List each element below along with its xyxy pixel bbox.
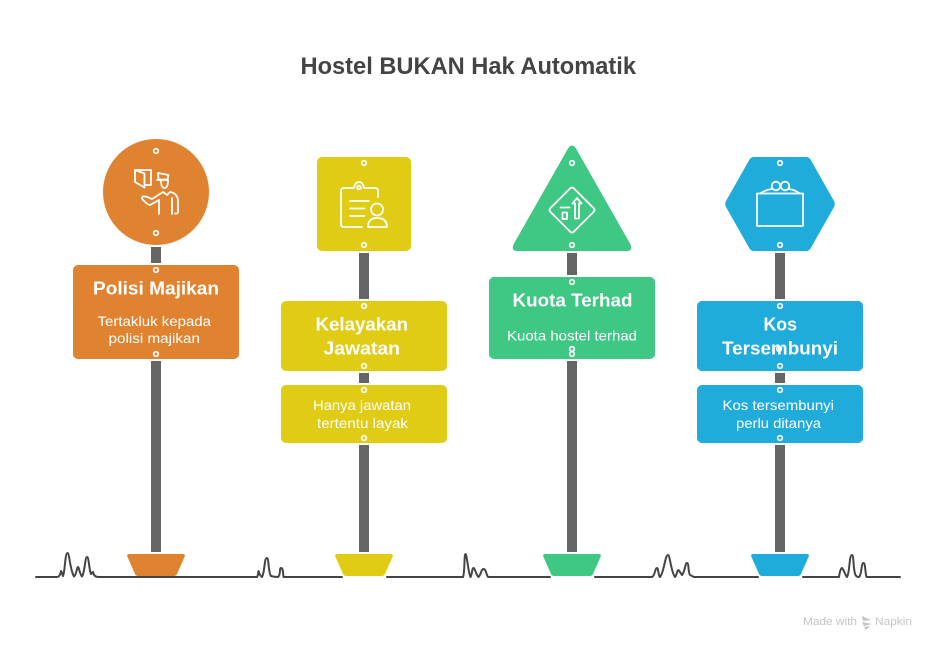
hexagonal sign bbox=[725, 157, 835, 251]
heading: Polisi Majikan bbox=[93, 278, 219, 298]
heading: Kuota Terhad bbox=[512, 290, 632, 310]
heading: Jawatan bbox=[324, 338, 400, 358]
signpost: Kos Tersembunyi bbox=[697, 157, 863, 576]
icon: napkin logo bbox=[862, 616, 872, 630]
signpost: Polisi Majikan bbox=[73, 139, 239, 576]
description plate bbox=[697, 385, 863, 443]
mounting holes bbox=[362, 161, 366, 440]
description: Kos tersembunyi bbox=[722, 397, 834, 413]
base bbox=[127, 554, 185, 576]
pole bbox=[151, 247, 161, 552]
description: Hanya jawatan bbox=[313, 397, 411, 413]
icon: officer with book bbox=[135, 170, 178, 214]
mounting holes bbox=[154, 149, 158, 356]
title plate bbox=[281, 301, 447, 371]
icon: hidden box bbox=[757, 182, 803, 226]
square sign bbox=[317, 157, 411, 251]
mounting holes bbox=[570, 161, 574, 356]
watermark: Made with bbox=[803, 616, 857, 628]
base bbox=[543, 554, 601, 576]
label plate bbox=[489, 277, 655, 359]
signpost: Kelayakan Jawatan bbox=[281, 157, 447, 576]
label plate bbox=[73, 265, 239, 359]
icon: clipboard with person bbox=[341, 182, 387, 227]
title: Hostel BUKAN Hak Automatik bbox=[300, 53, 637, 80]
circular sign bbox=[103, 139, 209, 245]
heading bbox=[316, 314, 408, 358]
heading: Tersembunyi bbox=[722, 338, 838, 358]
description: perlu ditanya bbox=[736, 415, 821, 431]
title plate bbox=[697, 301, 863, 371]
description: tertentu layak bbox=[317, 415, 409, 431]
description: polisi majikan bbox=[108, 330, 200, 346]
base bbox=[751, 554, 809, 576]
watermark: Napkin bbox=[875, 616, 912, 628]
icon: road sign diamond bbox=[550, 188, 594, 232]
watermark bbox=[803, 616, 912, 630]
description: Kuota hostel terhad bbox=[507, 328, 637, 344]
description: Tertakluk kepada bbox=[98, 313, 211, 329]
pole bbox=[775, 253, 785, 552]
pole bbox=[359, 253, 369, 552]
description bbox=[722, 397, 834, 431]
ground line with grass bbox=[36, 553, 900, 577]
pole bbox=[567, 253, 577, 552]
heading: Kos bbox=[764, 314, 797, 334]
base bbox=[335, 554, 393, 576]
heading: Kelayakan bbox=[316, 314, 408, 334]
description plate bbox=[281, 385, 447, 443]
triangular sign bbox=[513, 146, 631, 251]
heading bbox=[722, 314, 838, 358]
signpost: Kuota Terhad bbox=[489, 146, 655, 576]
description bbox=[98, 313, 211, 346]
mounting holes bbox=[777, 161, 782, 440]
description bbox=[313, 397, 411, 431]
